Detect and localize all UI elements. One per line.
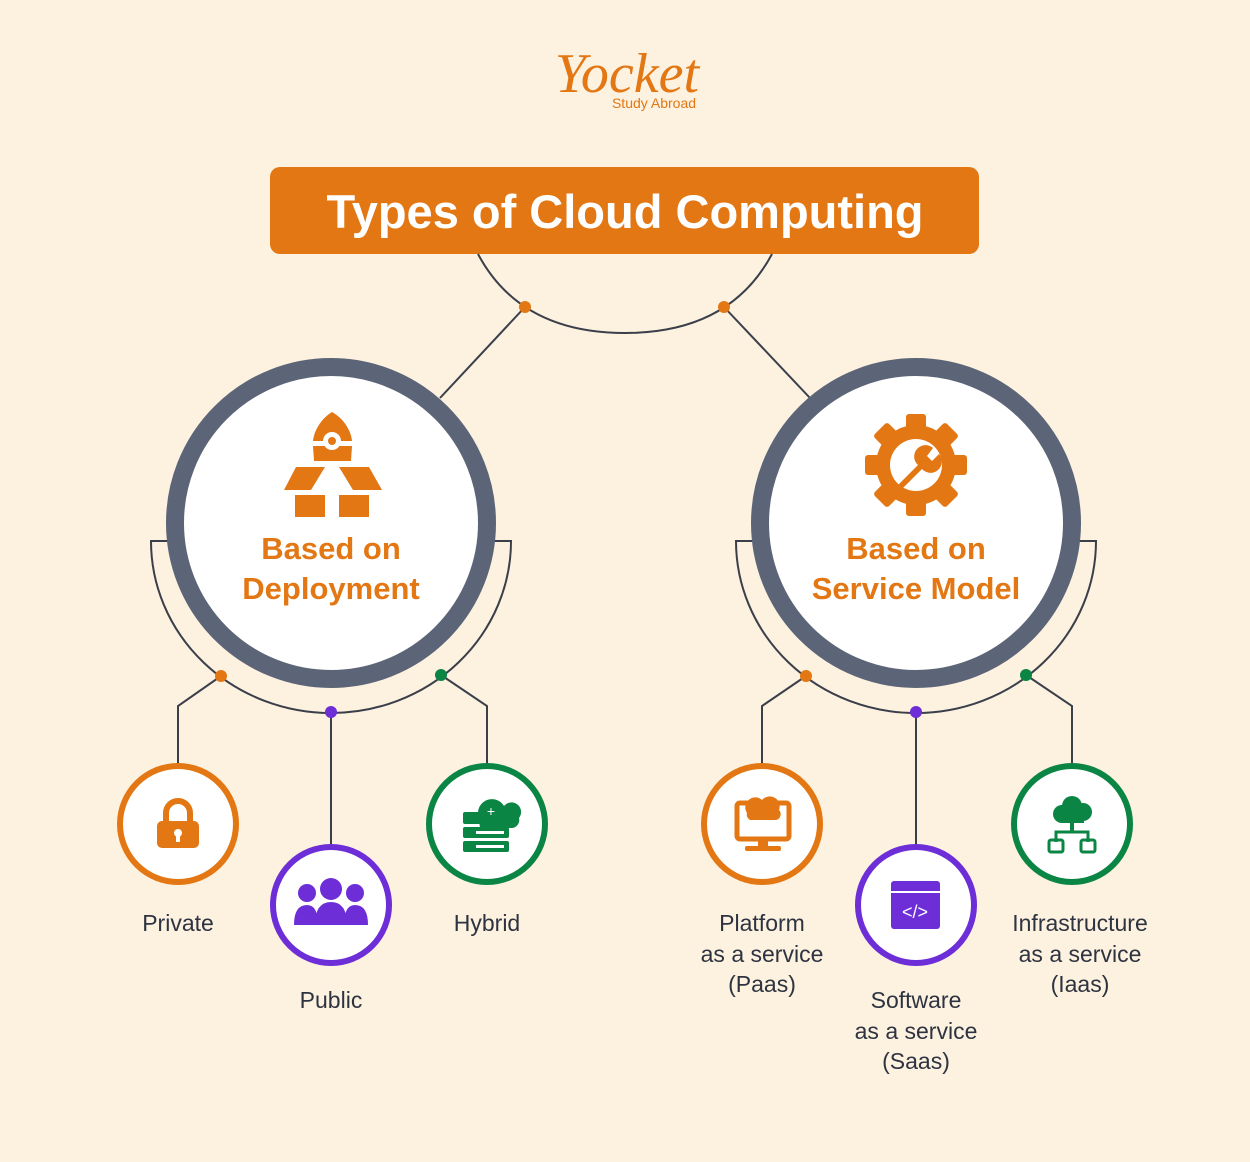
panel: deployment: Based on <box>261 531 401 566</box>
item: hybrid <box>429 766 545 936</box>
item: public: Public <box>300 987 362 1013</box>
panel: service model: Based on <box>846 531 986 566</box>
icon: cloud network <box>1049 796 1095 852</box>
item: paas: Platform <box>719 910 805 936</box>
panel: service model <box>760 367 1072 679</box>
item: iaas: as a service <box>1019 941 1141 967</box>
panel: service model: Service Model <box>812 571 1020 606</box>
item: iaas: (Iaas) <box>1051 971 1109 997</box>
icon: server cloud: + <box>487 803 495 819</box>
icon: server cloud <box>463 799 521 852</box>
panel: deployment <box>175 367 487 679</box>
item: iaas: Infrastructure <box>1012 910 1148 936</box>
icon: gear wrench <box>865 414 967 516</box>
icon: code window <box>891 881 940 929</box>
item: paas: (Paas) <box>728 971 796 997</box>
icon: monitor cloud <box>737 796 789 851</box>
item: private: Private <box>142 910 214 936</box>
panel: deployment: Deployment <box>242 571 420 606</box>
item: paas <box>701 766 823 997</box>
bracket: right <box>736 541 1096 845</box>
title <box>270 167 979 254</box>
bracket: left <box>151 541 511 845</box>
item: saas: (Saas) <box>882 1048 950 1074</box>
item: iaas <box>1012 766 1148 997</box>
item: paas: as a service <box>701 941 823 967</box>
logo: Yocket <box>555 43 700 105</box>
item: saas: as a service <box>855 1018 977 1044</box>
icon: lock <box>157 801 199 848</box>
item: saas <box>855 847 977 1074</box>
bracket dots <box>215 669 1032 718</box>
item: saas: Software <box>871 987 961 1013</box>
logo: Study Abroad <box>612 95 696 111</box>
connector arc from title <box>440 254 810 398</box>
item: private <box>120 766 236 936</box>
icon: people <box>294 878 368 925</box>
item: public <box>273 847 389 1013</box>
title: Types of Cloud Computing <box>326 185 924 238</box>
icon: rocket box <box>284 412 382 517</box>
item: hybrid: Hybrid <box>454 910 520 936</box>
icon: code window: </> <box>902 902 928 922</box>
